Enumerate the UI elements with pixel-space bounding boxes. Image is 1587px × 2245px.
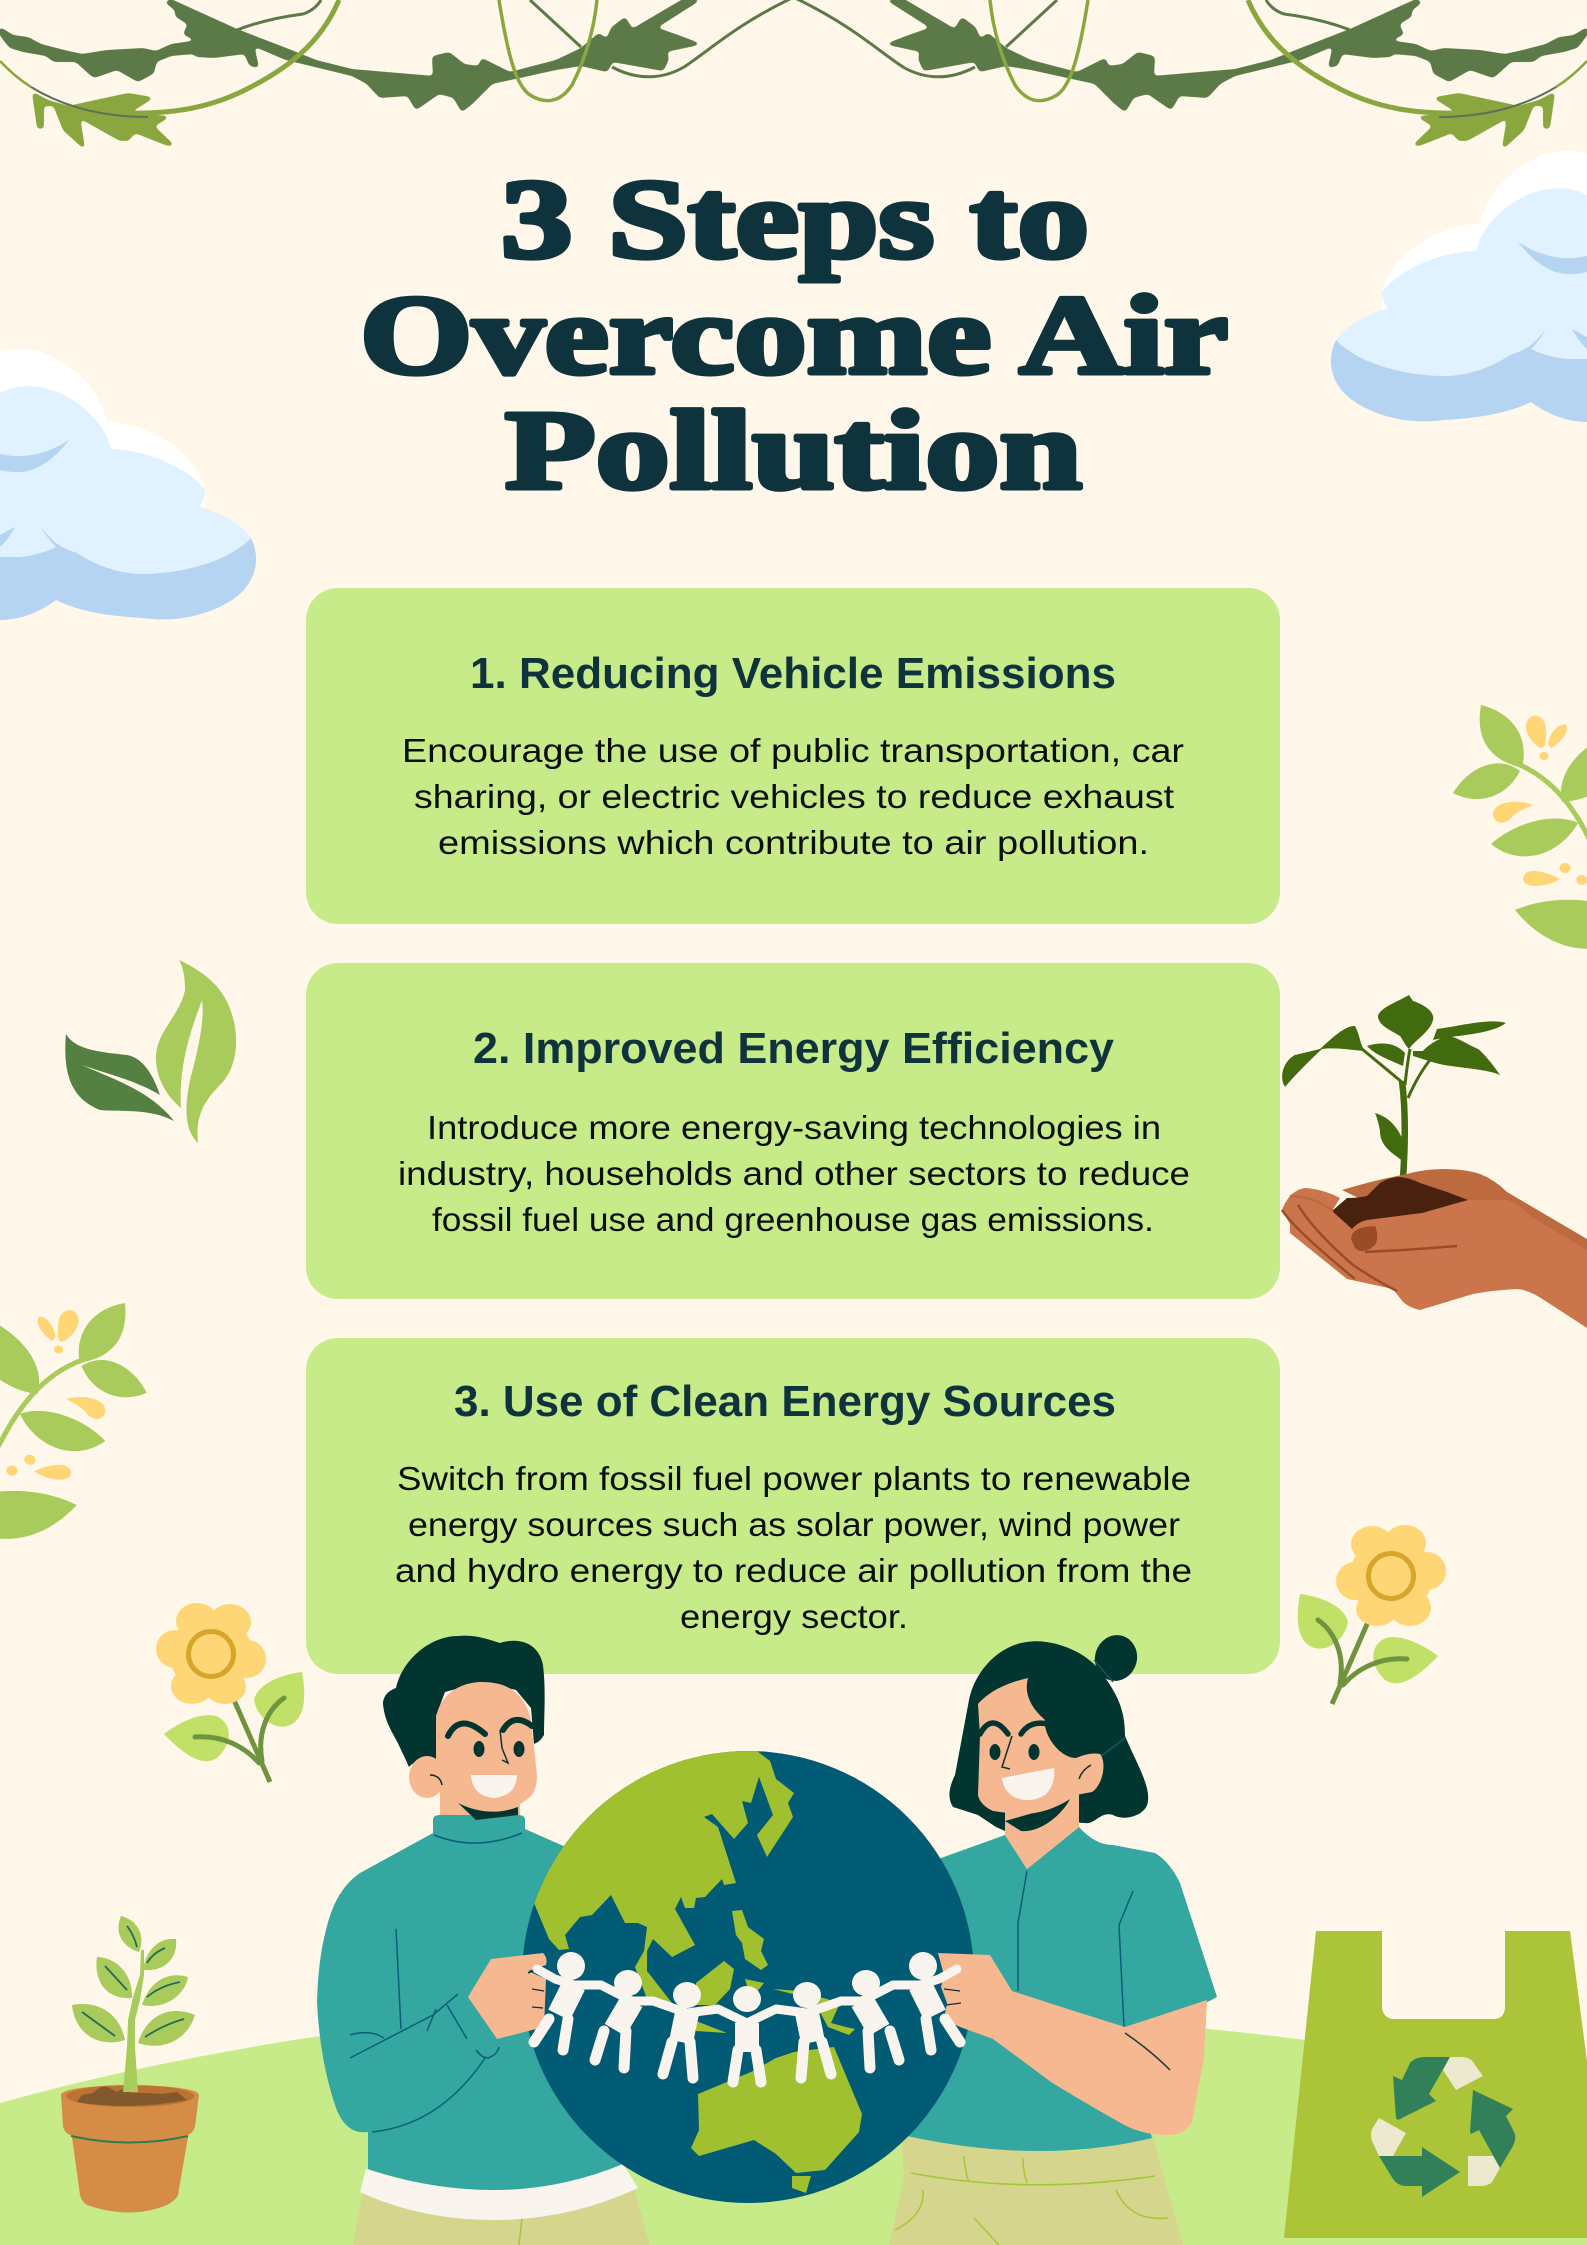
body: step 1 bbox=[402, 732, 1184, 861]
woman shirt bbox=[850, 1827, 1217, 2151]
soil bbox=[77, 2087, 187, 2106]
man features bbox=[448, 1720, 532, 1798]
heading: step 3: 3. Use of Clean Energy Sources bbox=[454, 1377, 1116, 1426]
land: philippines bbox=[732, 1910, 768, 1970]
icon: leafy branch left bbox=[0, 1291, 153, 1548]
woman hair bun bbox=[1090, 1630, 1142, 1686]
man chin shadow bbox=[458, 1803, 518, 1820]
woman pants bbox=[889, 2132, 1183, 2245]
pot rim bbox=[61, 2085, 199, 2142]
title bbox=[360, 157, 1228, 513]
character: man bbox=[317, 1636, 650, 2245]
body: step 1: sharing, or electric vehicles to reduce exhaust bbox=[414, 778, 1174, 815]
globe bbox=[523, 1751, 973, 2203]
title: Pollution bbox=[505, 388, 1082, 513]
hand bbox=[1282, 1188, 1587, 1328]
vine right bbox=[791, 0, 1587, 148]
woman chin shadow bbox=[1005, 1799, 1070, 1831]
icon: recycling bag bbox=[1284, 1931, 1587, 2238]
heading: step 2: 2. Improved Energy Efficiency bbox=[473, 1024, 1115, 1073]
seedling bbox=[1282, 995, 1506, 1178]
body: step 3: Switch from fossil fuel power plants to renewable bbox=[397, 1460, 1191, 1497]
man shirt hem bbox=[360, 2164, 638, 2220]
woman face bbox=[978, 1678, 1103, 1814]
body: step 1: Encourage the use of public transportation, car bbox=[402, 732, 1184, 769]
heads bbox=[557, 1952, 937, 2012]
land: tasmania bbox=[792, 2176, 811, 2193]
icon: leafy branch right bbox=[1453, 705, 1587, 949]
title: 3 Steps to bbox=[501, 157, 1089, 282]
body: step 3 bbox=[395, 1460, 1192, 1635]
man hair bbox=[383, 1636, 545, 1767]
ground hill bbox=[0, 2009, 1587, 2245]
body: step 1: emissions which contribute to air pollution. bbox=[438, 824, 1149, 861]
body: step 3: and hydro energy to reduce air pollution from the bbox=[395, 1552, 1192, 1589]
man pants bbox=[353, 2182, 650, 2245]
arms bbox=[537, 1969, 957, 2023]
body: step 3: energy sources such as solar power, wind power bbox=[408, 1506, 1180, 1543]
vine left bbox=[0, 0, 796, 148]
body: step 2 bbox=[398, 1109, 1190, 1238]
man hand bbox=[468, 1953, 547, 2039]
icon: flower left bbox=[156, 1603, 304, 1782]
body: step 2: Introduce more energy-saving technologies in bbox=[427, 1109, 1161, 1146]
man sweater bbox=[317, 1815, 640, 2190]
woman hair bbox=[949, 1641, 1148, 1831]
panel: step 1 bbox=[306, 588, 1280, 924]
body: step 3: energy sector. bbox=[680, 1598, 908, 1635]
icon: potted plant bbox=[61, 1916, 199, 2212]
paper people chain bbox=[534, 1952, 960, 2082]
man neck bbox=[440, 1780, 520, 1820]
heading: step 1: 1. Reducing Vehicle Emissions bbox=[470, 649, 1116, 698]
recycle arrows bbox=[1371, 2057, 1515, 2197]
woman neck bbox=[1005, 1790, 1079, 1869]
land: australia bbox=[691, 2047, 862, 2173]
palm back bbox=[1342, 1169, 1587, 1252]
man ear bbox=[409, 1756, 445, 1798]
body: step 2: fossil fuel use and greenhouse gas emissions. bbox=[432, 1201, 1154, 1238]
legs bbox=[534, 2019, 960, 2082]
soil bbox=[1332, 1177, 1468, 1232]
thumb nail bbox=[1351, 1226, 1377, 1251]
body: step 2: industry, households and other sectors to reduce bbox=[398, 1155, 1190, 1192]
land: asia bbox=[534, 1751, 794, 2003]
man face bbox=[436, 1682, 537, 1813]
plant bbox=[72, 1916, 195, 2092]
land: islands bbox=[696, 1961, 855, 2035]
character: woman bbox=[850, 1630, 1217, 2245]
icon: flower right bbox=[1298, 1525, 1446, 1704]
torsos bbox=[559, 1985, 935, 2052]
icon: twin leaves bbox=[65, 960, 236, 1143]
woman features bbox=[980, 1723, 1091, 1800]
pot body bbox=[72, 2137, 188, 2212]
cloud left bbox=[0, 349, 256, 620]
panel: step 3 bbox=[306, 1338, 1280, 1674]
panel: step 2 bbox=[306, 963, 1280, 1299]
title: Overcome Air bbox=[360, 273, 1228, 398]
icon: hand holding seedling bbox=[1282, 995, 1587, 1328]
woman arm and hand bbox=[938, 1953, 1207, 2135]
cloud right bbox=[1331, 151, 1587, 422]
